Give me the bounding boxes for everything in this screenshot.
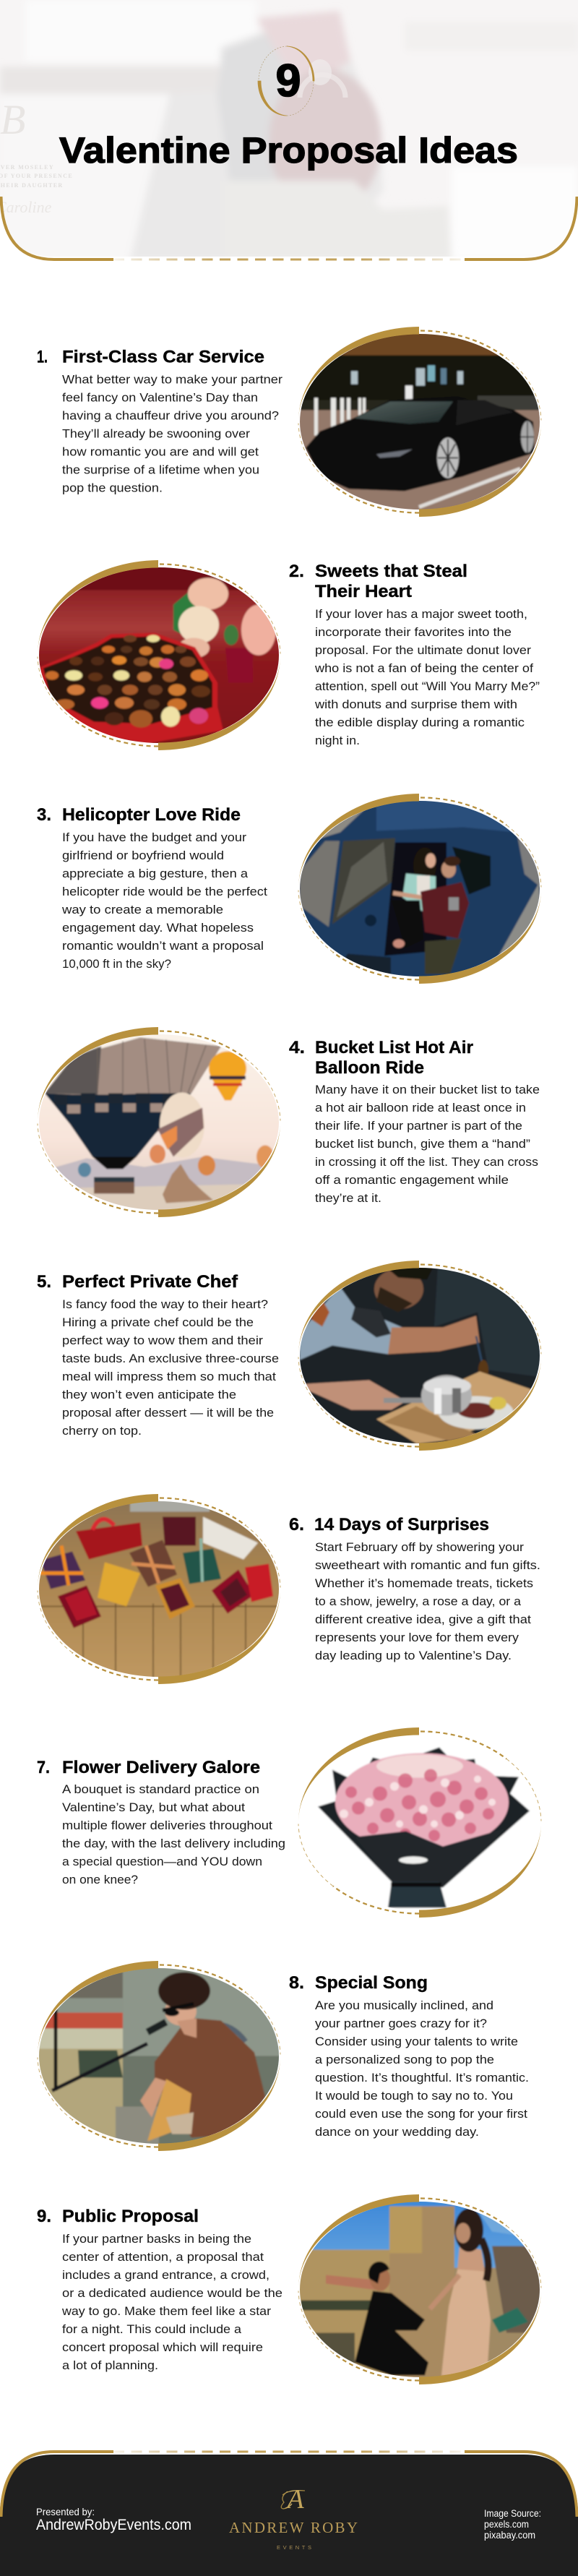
image source: pexels.com xyxy=(484,2518,529,2530)
presented by: Presented by: xyxy=(36,2506,95,2517)
photo: black sports car xyxy=(297,327,543,517)
body text 6: day leading up to Valentine’s Day. xyxy=(315,1649,512,1662)
photo: chef plating food xyxy=(297,1261,543,1451)
body text 4: their life. If your partner is part of the xyxy=(315,1119,522,1133)
body text 2: the edible display during a romantic xyxy=(315,716,525,729)
body text 2: night in. xyxy=(315,734,360,747)
panel: idea 1 xyxy=(37,327,543,517)
body text 1: how romantic you are and will get xyxy=(62,445,259,458)
footer background xyxy=(0,2455,578,2576)
heading 3: 3. xyxy=(37,805,51,825)
body text 5: Hiring a private chef could be the xyxy=(62,1315,254,1329)
body text 9: If your partner basks in being the xyxy=(62,2232,251,2246)
heading 9: Public Proposal xyxy=(62,2207,199,2226)
body text 8 xyxy=(315,1998,529,2139)
logo tagline: EVENTS xyxy=(277,2544,311,2551)
footer panel xyxy=(0,2452,578,2576)
photo: couple in helicopter xyxy=(297,794,543,984)
header panel xyxy=(0,0,578,260)
heading 6: 6. xyxy=(289,1515,304,1534)
body text 6: to a show, jewelry, a rose a day, or a xyxy=(315,1594,522,1608)
body text 7: the day, with the last delivery including xyxy=(62,1837,285,1850)
panel: idea 9 xyxy=(37,2194,543,2384)
body text 7 xyxy=(62,1782,285,1886)
panel: idea 7 xyxy=(37,1727,543,1918)
heading 4 xyxy=(289,1038,473,1078)
body text 6: Whether it’s homemade treats, tickets xyxy=(315,1576,533,1590)
body text 6 xyxy=(315,1540,540,1662)
heading 4: 4. xyxy=(289,1038,305,1057)
body text 4: a hot air balloon ride at least once in xyxy=(315,1101,526,1115)
image source: pixabay.com xyxy=(484,2529,535,2541)
body text 9: includes a grand entrance, a crowd, xyxy=(62,2268,269,2282)
heading 6: 14 Days of Surprises xyxy=(314,1515,489,1534)
body text 8: a personalized song to pop the xyxy=(315,2053,494,2066)
presented by xyxy=(36,2506,191,2533)
body text 3: romantic wouldn’t want a proposal xyxy=(62,939,264,953)
photo: wrapped gifts on wood xyxy=(36,1494,282,1684)
body text 7: Valentine’s Day, but what about xyxy=(62,1800,245,1814)
body text 3: way to create a memorable xyxy=(61,903,223,916)
body text 5 xyxy=(62,1297,279,1438)
photo: heart chocolate box xyxy=(36,560,282,750)
photo: rose bouquet xyxy=(297,1727,543,1918)
presented by: AndrewRobyEvents.com xyxy=(36,2517,191,2533)
title: Valentine Proposal Ideas xyxy=(59,130,518,171)
panel: idea 6 xyxy=(36,1494,540,1684)
body text 1: They’ll already be swooning over xyxy=(62,426,250,441)
body text 8: dance on your wedding day. xyxy=(315,2125,479,2139)
heading 1: 1. xyxy=(37,347,48,367)
heading 4: Balloon Ride xyxy=(315,1058,424,1078)
body text 4: bucket list bunch, give them a “hand” xyxy=(315,1137,530,1151)
body text 1: having a chauffeur drive you around? xyxy=(62,409,279,422)
body text 1 xyxy=(62,373,282,494)
body text 2: who is not a fan of being the center of xyxy=(314,661,533,675)
heading 7: 7. xyxy=(37,1758,50,1777)
body text 6: Start February off by showering your xyxy=(315,1540,524,1554)
header gold border xyxy=(1,197,577,259)
number ring xyxy=(258,46,314,116)
footer gold border xyxy=(1,2452,577,2517)
heading 8: 8. xyxy=(289,1973,304,1993)
body text 4: off a romantic engagement while xyxy=(315,1173,509,1187)
body text 1: the surprise of a lifetime when you xyxy=(62,463,259,477)
body text 2 xyxy=(314,607,540,747)
header background photo: ring box and invitation: B xyxy=(0,96,25,143)
body text 5: taste buds. An exclusive three-course xyxy=(62,1352,279,1365)
body text 3: 10,000 ft in the sky? xyxy=(62,957,171,971)
body text 9: a lot of planning. xyxy=(62,2358,158,2372)
body text 7: A bouquet is standard practice on xyxy=(62,1782,259,1796)
panel: idea 4 xyxy=(36,1027,540,1217)
body text 1: feel fancy on Valentine’s Day than xyxy=(62,390,258,405)
body text 3: helicopter ride would be the perfect xyxy=(62,885,267,898)
body text 1: pop the question. xyxy=(62,481,163,494)
body text 2: proposal. For the ultimate donut lover xyxy=(315,643,531,657)
photo: musician with guitar xyxy=(36,1961,282,2151)
body text 9 xyxy=(61,2232,282,2372)
body text 8: It would be tough to say no to. You xyxy=(315,2089,513,2103)
panel: idea 5 xyxy=(37,1261,543,1451)
body text 9: concert proposal which will require xyxy=(62,2340,263,2354)
body text 7: on one knee? xyxy=(62,1873,138,1886)
body text 8: Are you musically inclined, and xyxy=(315,1998,493,2012)
body text 3 xyxy=(61,830,267,971)
heading 9: 9. xyxy=(37,2207,51,2226)
body text 5: proposal after dessert — it will be the xyxy=(62,1406,274,1420)
body text 5: meal will impress them so much that xyxy=(62,1370,276,1383)
body text 5: perfect way to wow them and their xyxy=(62,1334,263,1347)
logo mark: A xyxy=(285,2484,304,2515)
heading 4: Bucket List Hot Air xyxy=(315,1038,473,1057)
heading 2 xyxy=(289,562,467,601)
body text 5: cherry on top. xyxy=(62,1424,142,1438)
image source xyxy=(484,2507,541,2541)
big number 9: 9 xyxy=(275,56,301,106)
body text 3: girlfriend or boyfriend would xyxy=(62,849,224,862)
header background photo: ring box and invitation: OF YOUR PRESENCE xyxy=(0,173,73,179)
body text 4: Many have it on their bucket list to take xyxy=(315,1083,540,1096)
body text 3: appreciate a big gesture, then a xyxy=(62,867,249,880)
body text 2: incorporate their favorites into the xyxy=(315,625,512,639)
body text 4: in crossing it off the list. They can cross xyxy=(315,1155,538,1169)
heading 3: Helicopter Love Ride xyxy=(62,805,241,825)
panel: idea 3 xyxy=(37,794,543,984)
body text 8: could even use the song for your first xyxy=(315,2107,527,2121)
body text 2: If your lover has a major sweet tooth, xyxy=(315,607,527,621)
body text 9: for a night. This could include a xyxy=(62,2322,242,2336)
heading 5: 5. xyxy=(37,1272,51,1292)
body text 8: question. It’s thoughtful. It’s romantic. xyxy=(315,2071,529,2085)
header background photo: ring box and invitation xyxy=(0,0,578,260)
heading 2: Sweets that Steal xyxy=(315,562,467,581)
logo wordmark: ANDREW ROBY xyxy=(229,2519,358,2536)
panel: idea 2 xyxy=(36,560,540,750)
body text 9: or a dedicated audience would be the xyxy=(62,2286,282,2300)
body text 2: with donuts and surprise them with xyxy=(314,697,517,711)
logo: Andrew Roby Events xyxy=(229,2484,358,2551)
body text 8: your partner goes crazy for it? xyxy=(315,2017,487,2030)
heading 8: Special Song xyxy=(315,1973,428,1993)
body text 3: engagement day. What hopeless xyxy=(62,921,254,935)
body text 9: center of attention, a proposal that xyxy=(62,2250,264,2264)
body text 7: a special question—and YOU down xyxy=(62,1855,262,1868)
photo: kneeling marriage proposal xyxy=(297,2194,543,2384)
body text 9: way to go. Make them feel like a star xyxy=(61,2304,271,2318)
body text 6: sweetheart with romantic and fun gifts. xyxy=(315,1558,540,1572)
body text 5: they won’t even anticipate the xyxy=(62,1388,236,1401)
heading 2: 2. xyxy=(289,562,304,581)
body text 8: Consider using your talents to write xyxy=(315,2035,518,2048)
body text 7: multiple flower deliveries throughout xyxy=(62,1819,272,1832)
heading 7: Flower Delivery Galore xyxy=(62,1758,260,1777)
heading 5: Perfect Private Chef xyxy=(62,1272,238,1292)
panel: idea 8 xyxy=(36,1961,529,2151)
heading 1: First-Class Car Service xyxy=(62,347,264,367)
body text 2: attention, spell out “Will You Marry Me?” xyxy=(315,679,540,693)
heading 2: Their Heart xyxy=(315,582,412,601)
body text 3: If you have the budget and your xyxy=(62,830,246,844)
body text 5: Is fancy food the way to their heart? xyxy=(62,1297,268,1311)
photo: hot air balloons xyxy=(36,1027,282,1217)
body text 4: they’re at it. xyxy=(315,1191,381,1205)
body text 6: represents your love for them every xyxy=(315,1631,519,1644)
image source: Image Source: xyxy=(484,2507,541,2519)
body text 6: different creative idea, give a gift that xyxy=(315,1613,531,1626)
body text 4 xyxy=(315,1083,540,1205)
body text 1: What better way to make your partner xyxy=(62,373,282,386)
